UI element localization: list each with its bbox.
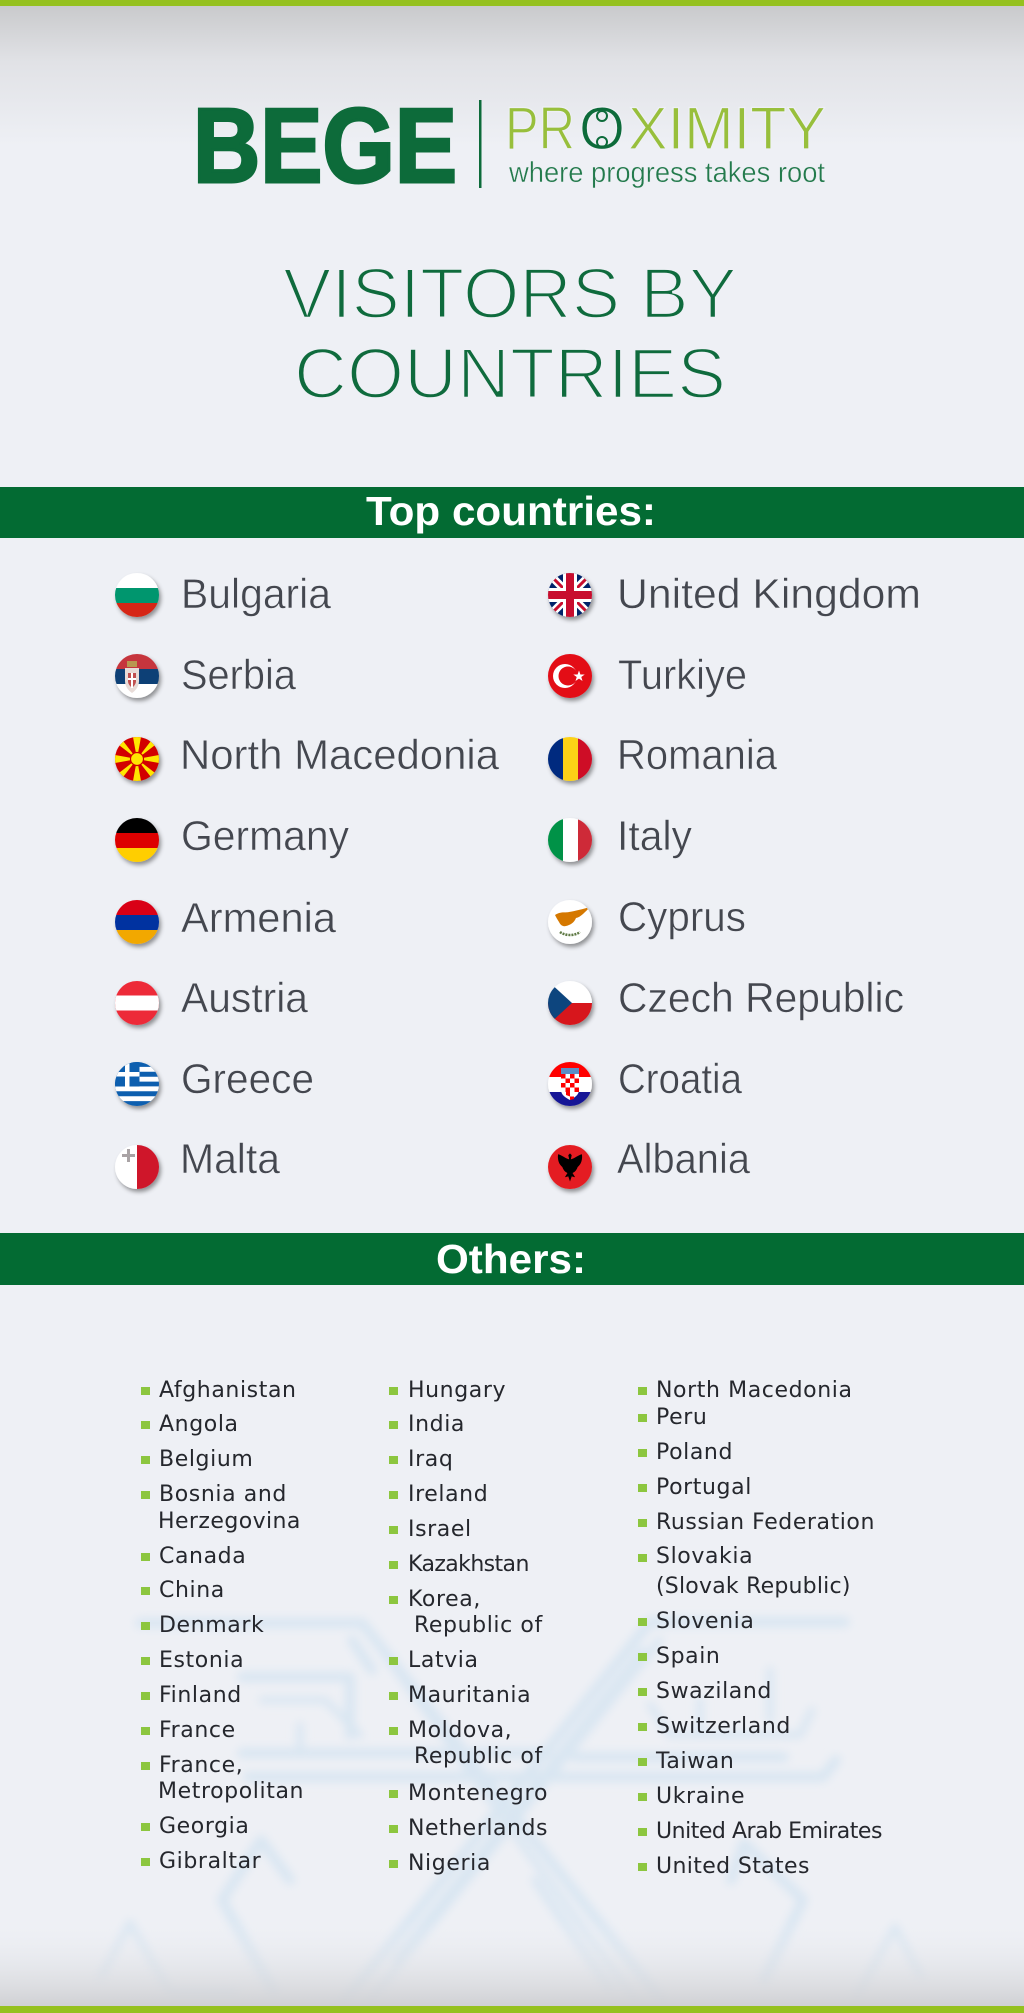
list column 3: Russian Federation: [656, 1510, 875, 1535]
row: Bulgaria: [115, 570, 332, 617]
row: Cyprus: [548, 893, 746, 944]
list column 2: India: [408, 1412, 465, 1437]
list column 2: Mauritania: [408, 1683, 531, 1708]
list column 3: Poland: [656, 1440, 733, 1465]
logo wordmark: PROXIMITY: XIMITY: [628, 95, 826, 162]
logo wordmark: PROXIMITY: O: [579, 95, 625, 162]
list column 1: Herzegovina: [158, 1509, 301, 1534]
row: Greece: [115, 1055, 314, 1106]
list column 1: France: [159, 1718, 236, 1743]
logo divider: [479, 100, 482, 188]
list column 2: Republic of: [414, 1613, 543, 1638]
section header: top countries: Top countries:: [366, 488, 656, 534]
logo wordmark: PROXIMITY: [505, 95, 826, 162]
row: Albania: Albania: [617, 1135, 751, 1182]
list column 1: Angola: [159, 1412, 239, 1437]
list column 2: Korea,: [408, 1587, 481, 1612]
bullets column 1: [141, 1387, 150, 1866]
list column 1: China: [159, 1578, 225, 1603]
list column 1: Georgia: [159, 1814, 249, 1839]
list column 2: Montenegro: [408, 1781, 548, 1806]
list column 2: Republic of: [414, 1744, 543, 1769]
list column 2: [389, 1378, 548, 1876]
list column 3: United Arab Emirates: [656, 1819, 883, 1844]
row: United Kingdom: United Kingdom: [617, 570, 921, 617]
title: [283, 255, 737, 414]
list column 2: Netherlands: [408, 1816, 548, 1841]
row: Armenia: [115, 894, 337, 944]
list column 3: Portugal: [656, 1475, 752, 1500]
panel: top countries right column: [548, 570, 921, 1189]
row: Albania: [548, 1135, 751, 1189]
row: North Macedonia: North Macedonia: [180, 731, 500, 778]
list column 1: Afghanistan: [159, 1378, 297, 1403]
list column 2: Latvia: [408, 1648, 479, 1673]
row: Turkiye: Turkiye: [618, 651, 747, 698]
list column 3: Switzerland: [656, 1714, 791, 1739]
row: Croatia: [548, 1055, 743, 1106]
row: Austria: Austria: [181, 974, 309, 1021]
row: Serbia: Serbia: [181, 651, 297, 698]
row: Germany: Germany: [181, 812, 349, 859]
row: Malta: [115, 1135, 281, 1189]
row: Romania: [548, 731, 778, 781]
title: COUNTRIES: [294, 335, 726, 414]
list column 1: Estonia: [159, 1648, 244, 1673]
row: Italy: [548, 812, 692, 862]
list column 2: Moldova,: [408, 1718, 512, 1743]
list column 3: Swaziland: [656, 1679, 772, 1704]
list column 2: Israel: [408, 1517, 472, 1542]
title: VISITORS BY: [283, 255, 737, 334]
list column 3: Slovenia: [656, 1609, 754, 1634]
row: Greece: Greece: [181, 1055, 314, 1102]
list column 3: (Slovak Republic): [656, 1574, 851, 1599]
row: Malta: Malta: [180, 1135, 281, 1182]
list column 3: North Macedonia: [656, 1378, 853, 1403]
logo wordmark: PROXIMITY: PR: [505, 95, 575, 162]
list column 2: Nigeria: [408, 1851, 491, 1876]
list column 2: Kazakhstan: [408, 1552, 530, 1577]
row: Croatia: Croatia: [618, 1055, 743, 1102]
section header: others: [0, 1233, 1024, 1285]
bottom shading: [0, 1920, 1024, 2007]
row: Czech Republic: Czech Republic: [618, 974, 904, 1021]
row: Austria: [115, 974, 309, 1025]
bullets column 2: [389, 1387, 398, 1868]
list column 3: Peru: [656, 1405, 707, 1430]
list column 3: Spain: [656, 1644, 720, 1669]
list column 3: Slovakia: [656, 1544, 753, 1569]
list column 1: Finland: [159, 1683, 242, 1708]
list column 2: Ireland: [408, 1482, 488, 1507]
logo: [193, 87, 826, 205]
section header: others: Others:: [436, 1236, 586, 1282]
list column 1: Canada: [159, 1544, 246, 1569]
row: Serbia: [115, 651, 297, 698]
bullets column 3: [638, 1387, 647, 1871]
list column 3: [638, 1378, 883, 1879]
logo wordmark: BEGE: BEGE: [193, 87, 457, 205]
list column 1: Bosnia and: [159, 1482, 287, 1507]
list column 1: France,: [159, 1753, 243, 1778]
bottom accent bar: [0, 2006, 1024, 2013]
row: Turkiye: [548, 651, 747, 698]
logo tagline: where progress takes root: [508, 157, 825, 189]
row: Italy: Italy: [617, 812, 692, 859]
list column 2: Iraq: [408, 1447, 453, 1472]
list column 3: Taiwan: [655, 1749, 734, 1774]
row: Cyprus: Cyprus: [618, 893, 746, 940]
section header: top countries: [0, 487, 1024, 538]
list column 1: Belgium: [159, 1447, 253, 1472]
row: Romania: Romania: [617, 731, 778, 778]
row: Germany: [115, 812, 349, 862]
list column 1: [141, 1378, 304, 1874]
row: Bulgaria: Bulgaria: [181, 570, 332, 617]
row: Armenia: Armenia: [181, 894, 337, 941]
list column 3: United States: [656, 1854, 810, 1879]
list column 1: Denmark: [159, 1613, 264, 1638]
list column 2: Hungary: [408, 1378, 506, 1403]
panel: top countries left column: [115, 570, 500, 1189]
list column 3: Ukraine: [656, 1784, 745, 1809]
list column 1: Metropolitan: [158, 1779, 304, 1804]
top accent bar: [0, 0, 1024, 6]
background circuit pattern: [101, 1622, 921, 2007]
list column 1: Gibraltar: [159, 1849, 262, 1874]
